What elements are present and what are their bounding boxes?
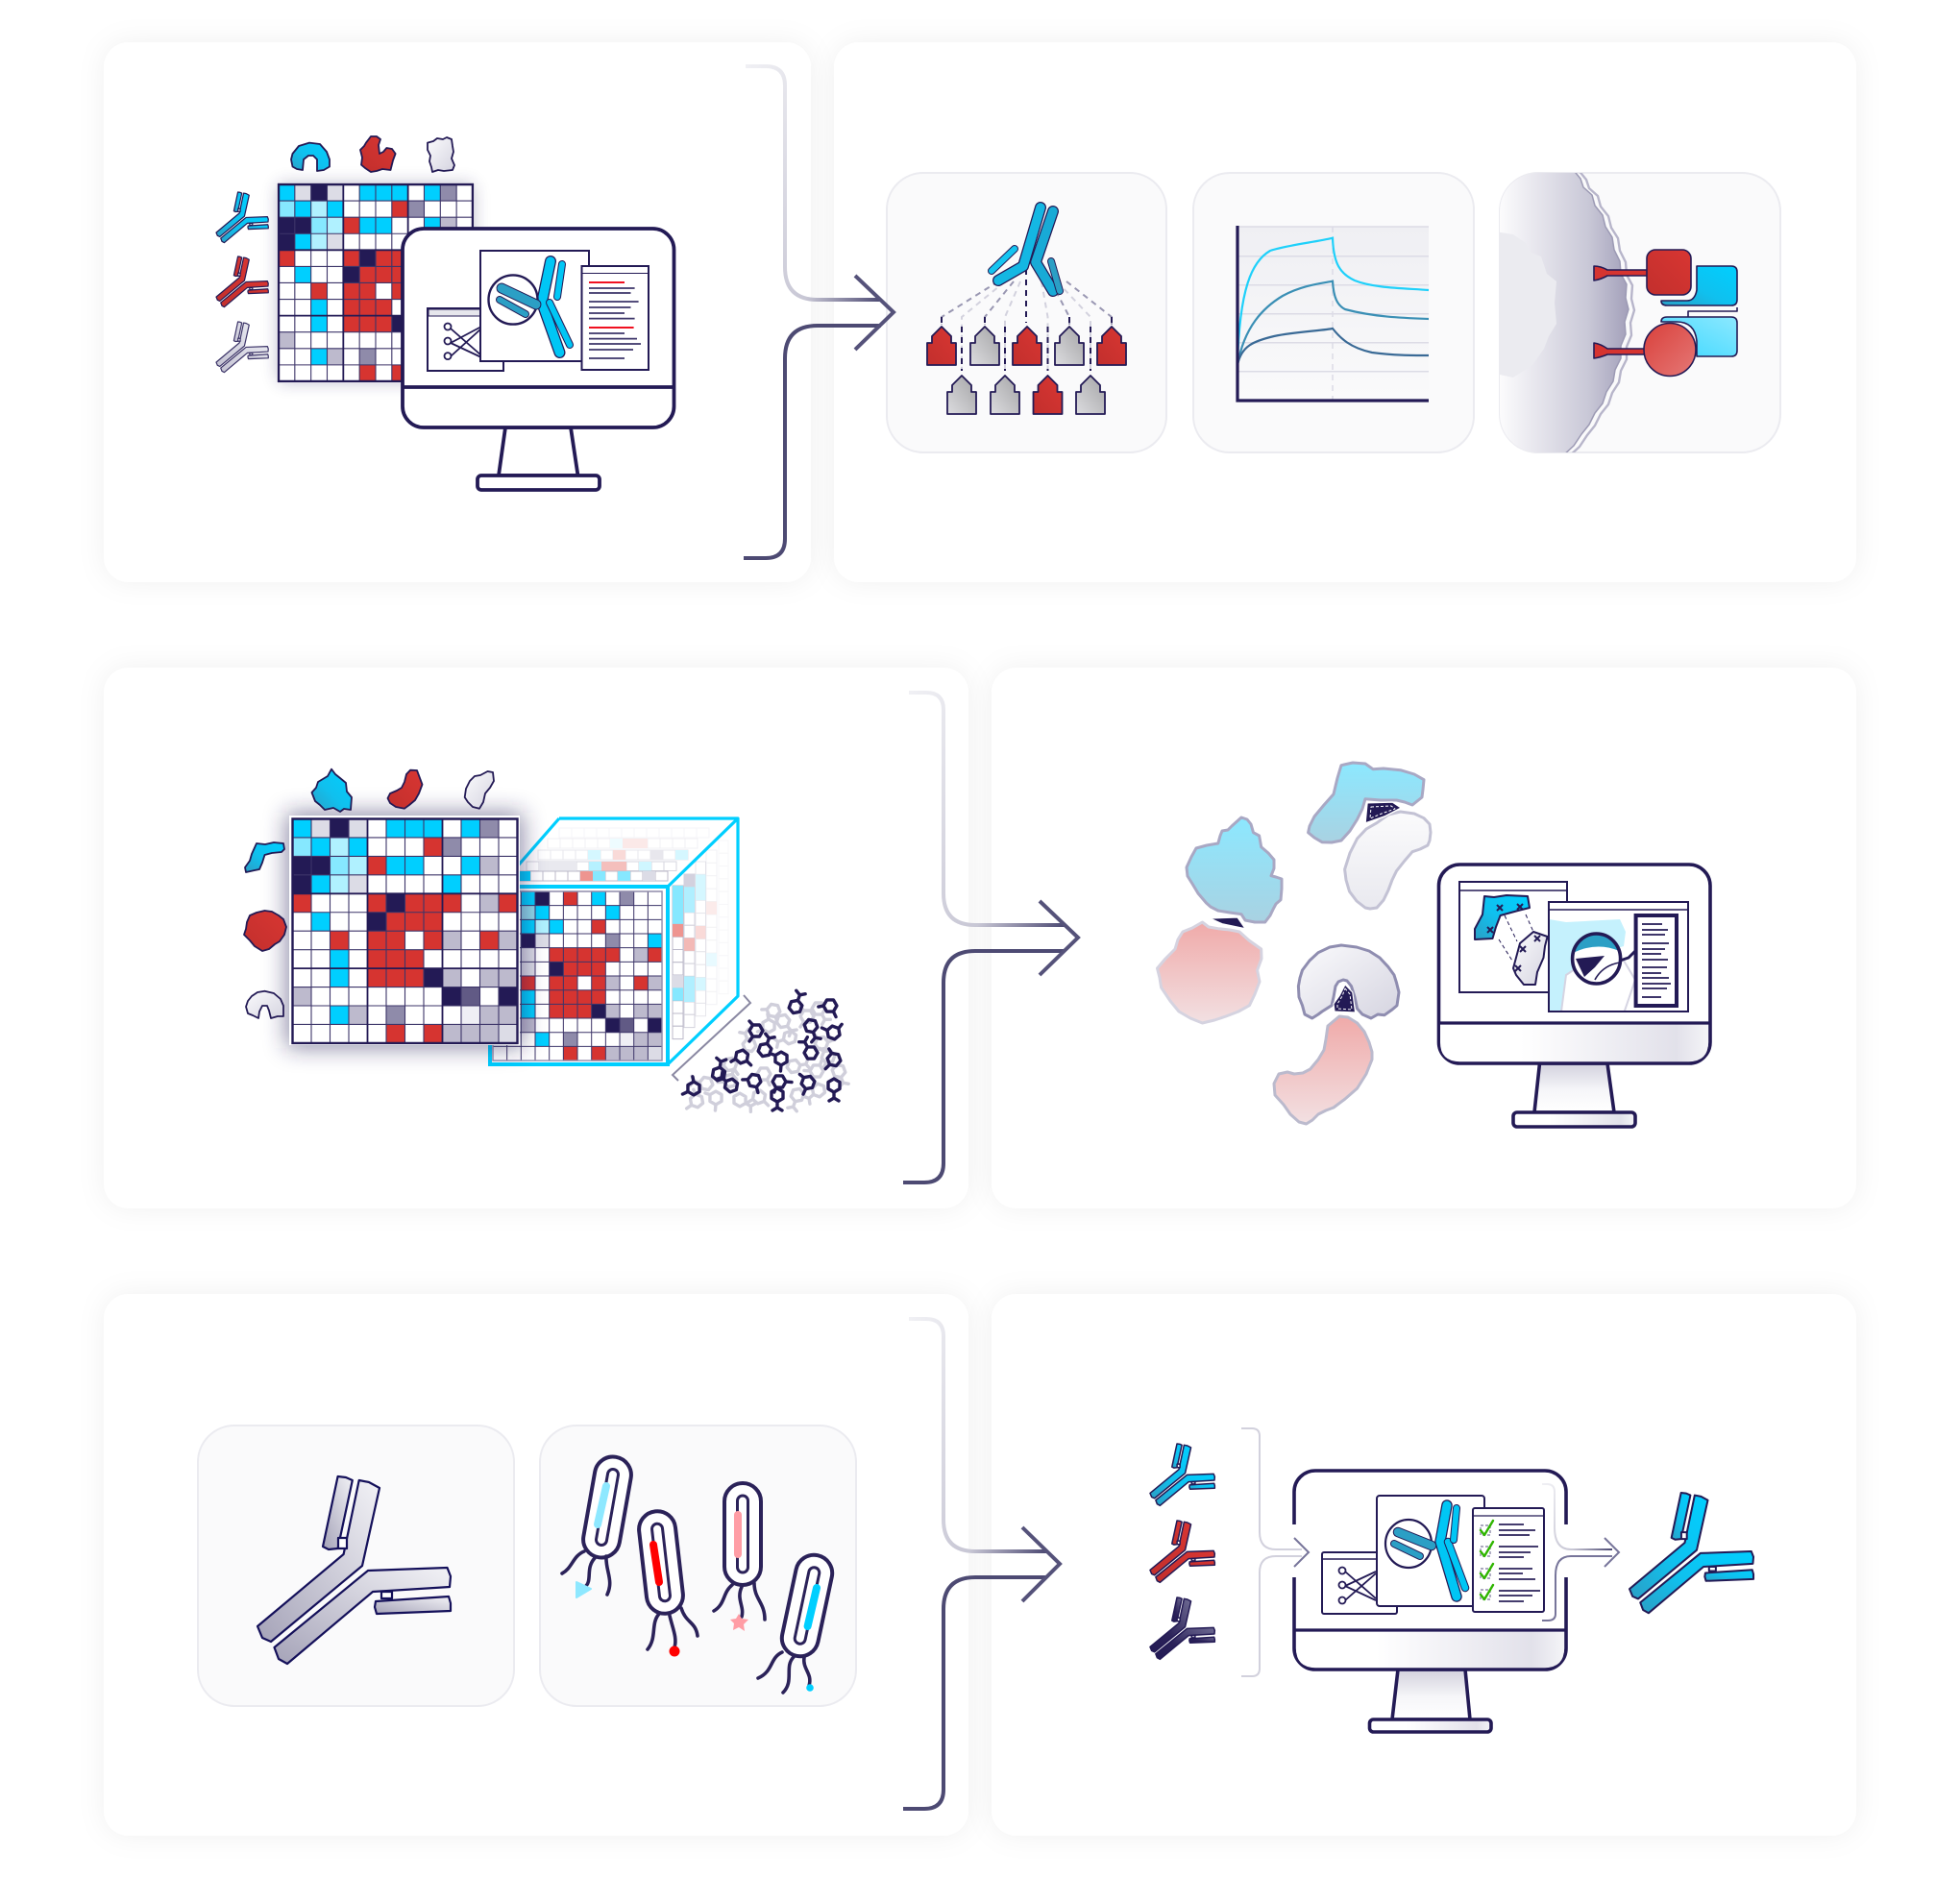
window: checklist <box>1473 1508 1544 1612</box>
magnifying lens <box>1573 934 1635 984</box>
arrow: row 3 <box>903 1319 1060 1809</box>
window: results document <box>582 266 649 370</box>
window: network <box>428 308 503 371</box>
icons: antigens row 2 <box>244 769 494 1018</box>
curve: medium affinity <box>1237 281 1429 365</box>
window: antibody structure <box>480 251 589 361</box>
icons: antigens row 1 <box>291 136 454 172</box>
arrow: monitor input <box>1241 1428 1309 1676</box>
heat map: antibody vs antigen <box>277 183 475 383</box>
window: docking pose <box>1459 882 1567 992</box>
card: antibody <box>198 1426 514 1706</box>
panel: row 2 left, structural matrix cube <box>104 668 968 1208</box>
monitor with structure model <box>1439 865 1710 1127</box>
icons: antibodies row 1 <box>216 192 268 373</box>
panel: row 1 left, screening matrix <box>104 42 811 582</box>
window: contact detail <box>1549 902 1688 1013</box>
monitor with analysis <box>403 229 674 490</box>
panel: row 3 right, engineered antibody output <box>992 1294 1856 1836</box>
card: epitope peptide mapping <box>887 173 1166 452</box>
receptor, red circle <box>1594 323 1696 377</box>
bacterium 3 <box>714 1483 765 1631</box>
antibody on peptides <box>992 207 1060 291</box>
fading top layers <box>518 828 709 881</box>
bacterium 4 <box>758 1551 836 1693</box>
dashed fan lines <box>942 269 1112 371</box>
back edges of cube <box>500 818 738 1064</box>
window: antibody structure <box>1377 1496 1484 1606</box>
complex: blue and white fragments <box>1309 763 1431 909</box>
chart axes <box>1237 226 1429 401</box>
bracket <box>673 995 750 1081</box>
complex: blue and pink globular <box>1157 817 1282 1023</box>
arrow: row 2 <box>903 693 1078 1182</box>
curve: low affinity <box>1237 329 1429 365</box>
icons: input antibodies <box>1150 1444 1214 1659</box>
faint molecules <box>687 999 849 1113</box>
card: cell surface receptor <box>1494 168 1780 457</box>
monitor with ranked results <box>1289 1471 1571 1732</box>
icon: final antibody <box>1629 1493 1753 1613</box>
arrow: row 1 <box>744 66 894 558</box>
peptides row B <box>947 376 1105 414</box>
panel: row 2 right, structure prediction <box>1156 761 1712 1129</box>
small molecules library <box>673 990 849 1113</box>
receptor, red square <box>1594 250 1691 295</box>
peptides row A <box>927 327 1126 365</box>
arrow: monitor output <box>1542 1484 1619 1621</box>
dark molecules <box>682 990 845 1110</box>
window: network <box>1322 1552 1397 1614</box>
fading side layers <box>673 841 728 1039</box>
receptor pair, blue <box>1661 266 1737 356</box>
main matrix with shadow <box>286 813 523 1048</box>
bacterium 1 <box>562 1454 634 1597</box>
card: binding kinetics chart <box>1193 173 1474 452</box>
front matrix of cube <box>490 887 668 1064</box>
bacterium 2 <box>637 1509 698 1656</box>
card: phage display bacteria <box>540 1426 856 1706</box>
complex: arch and bean <box>1274 945 1399 1124</box>
panel: row 3 left, antibody and phage library <box>104 1294 968 1836</box>
side panel of text lines <box>1636 915 1677 1006</box>
curve: high affinity <box>1237 238 1429 365</box>
panel: row 1 right, characterisation <box>886 172 1781 453</box>
cube of matrices <box>490 818 738 1064</box>
